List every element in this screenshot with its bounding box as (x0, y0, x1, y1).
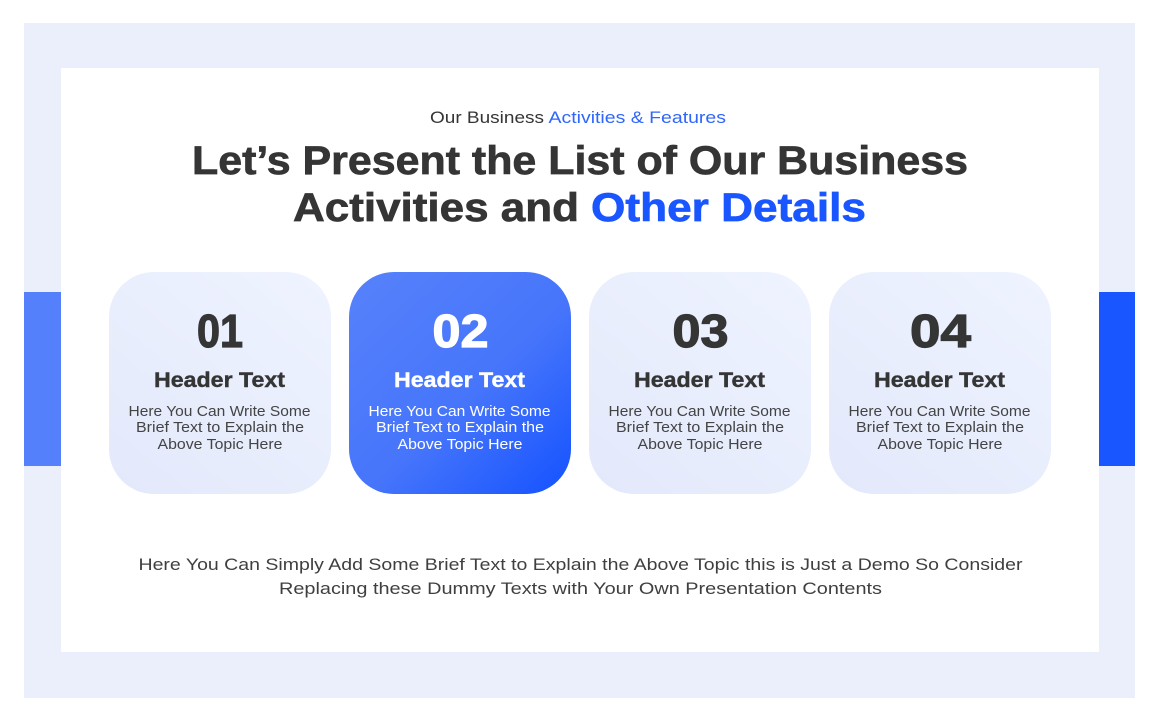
title: Let’s Present the List of Our Business (192, 139, 968, 183)
footer text: Here You Can Simply Add Some Brief Text to Explain the Above Topic this is Just a Demo So Consider (138, 555, 1023, 574)
card 02 header: Header Text (394, 369, 525, 392)
subtitle: Our Business (430, 108, 544, 127)
title: Activities and (293, 186, 579, 230)
card 02 highlighted (349, 272, 571, 494)
card 02 body text (368, 404, 550, 453)
card 04 (829, 272, 1051, 494)
left accent bar (24, 292, 61, 466)
card 03 body text: Here You Can Write Some (608, 404, 790, 420)
card 03 header: Header Text (634, 369, 765, 392)
subtitle: Activities & Features (548, 108, 726, 127)
card 01 body text: Brief Text to Explain the (136, 420, 304, 436)
card 03 (589, 272, 811, 494)
card 02 body text: Above Topic Here (398, 437, 522, 453)
card 03 number: 03 (672, 305, 728, 357)
card 01 body text (128, 404, 310, 453)
card 02 body text: Here You Can Write Some (368, 404, 550, 420)
footer text (138, 555, 1023, 598)
card 04 body text: Brief Text to Explain the (856, 420, 1024, 436)
title: Other Details (591, 186, 866, 230)
title (192, 139, 968, 230)
card 03 body text: Above Topic Here (638, 437, 762, 453)
card 04 body text: Here You Can Write Some (848, 404, 1030, 420)
card 02 body text: Brief Text to Explain the (376, 420, 544, 436)
card 04 header: Header Text (874, 369, 1005, 392)
footer text: Replacing these Dummy Texts with Your Own Presentation Contents (279, 579, 882, 598)
card 01 number: 01 (197, 305, 243, 357)
card 04 body text (848, 404, 1030, 453)
right accent bar (1099, 292, 1135, 466)
card 01 header: Header Text (154, 369, 285, 392)
card 01 body text: Above Topic Here (158, 437, 282, 453)
card 01 (109, 272, 331, 494)
card 04 body text: Above Topic Here (878, 437, 1002, 453)
card 03 body text: Brief Text to Explain the (616, 420, 784, 436)
inner white panel (61, 68, 1099, 652)
subtitle (430, 108, 726, 127)
card 01 body text: Here You Can Write Some (128, 404, 310, 420)
card 04 number: 04 (910, 305, 971, 357)
card 02 number: 02 (432, 305, 488, 357)
card 03 body text (608, 404, 790, 453)
